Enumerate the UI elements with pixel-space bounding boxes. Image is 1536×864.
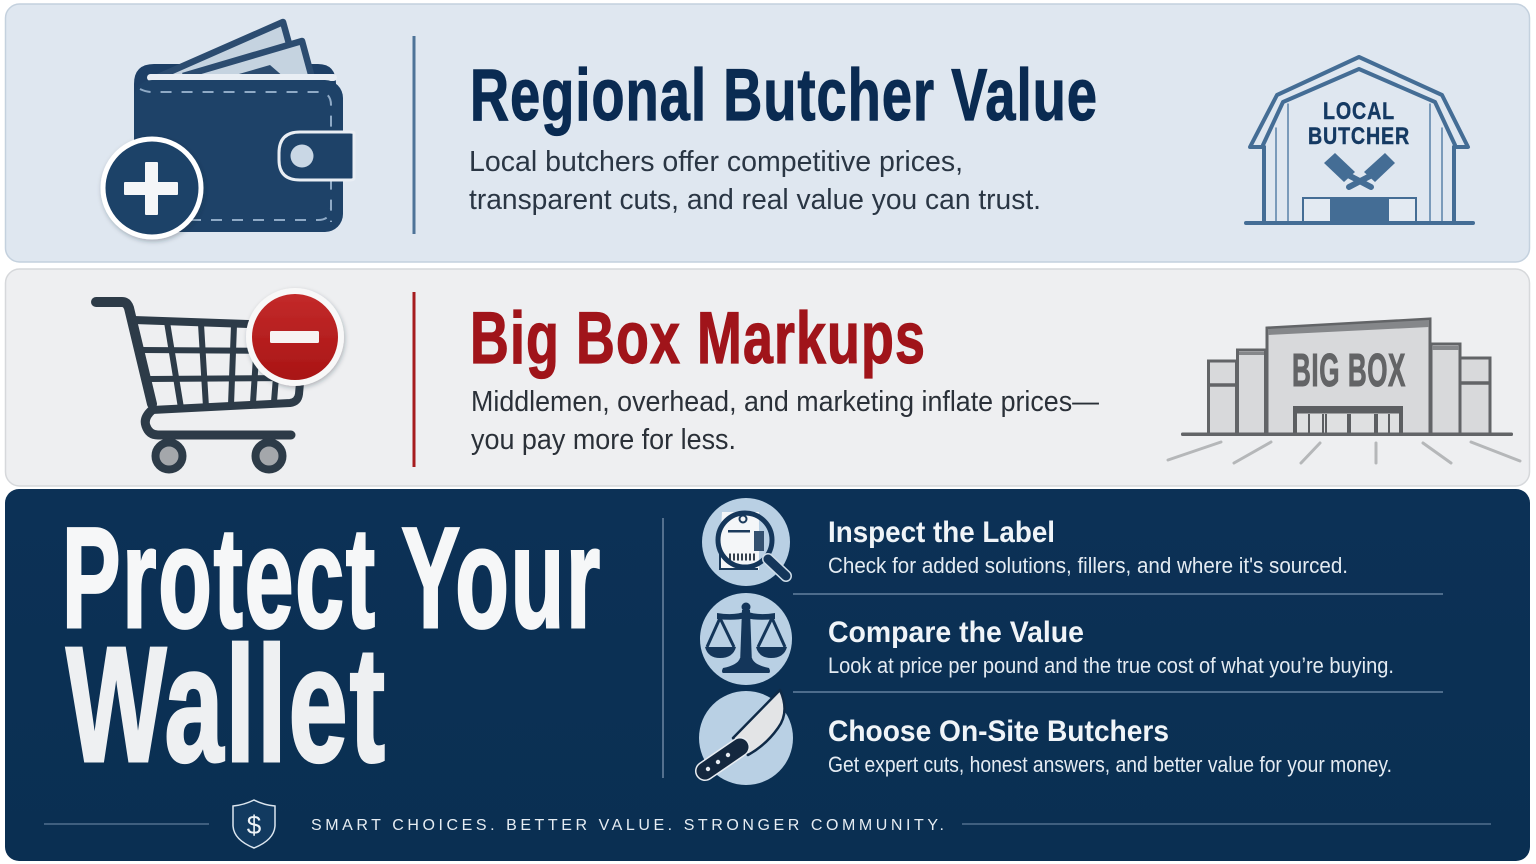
- divider: panel one: [412, 36, 416, 234]
- label: compare the value: Compare the Value: [828, 616, 1084, 649]
- separator two: [793, 691, 1443, 693]
- heading: big box markups: Big Box Markups: [470, 298, 926, 379]
- item: inspect the label: [702, 498, 1348, 586]
- icon: shield with dollar: [233, 800, 275, 848]
- icon: shield with dollar: $: [247, 810, 262, 840]
- label: inspect the label: Inspect the Label: [828, 516, 1055, 549]
- panel: protect your wallet: [5, 489, 1530, 861]
- text block: big box description: you pay more for less.: [471, 424, 736, 456]
- panel: big box markups: [6, 269, 1530, 486]
- heading: protect your wallet: Protect Your: [62, 499, 602, 658]
- icon: local butcher barn: LOCAL: [1323, 98, 1395, 125]
- icon: shopping cart with minus: [96, 291, 341, 470]
- icon: magnifying glass over label: [702, 498, 790, 586]
- icon: balance scales: [700, 593, 792, 685]
- item: compare the value: [700, 593, 1394, 685]
- text: compare description: Look at price per pound and the true cost of what you’re buying.: [828, 653, 1394, 678]
- text block: butcher description: transparent cuts, and real value you can trust.: [469, 184, 1041, 216]
- item: choose on-site butchers: [699, 690, 1392, 785]
- text block: butcher description: Local butchers offer competitive prices,: [469, 146, 963, 178]
- icon: local butcher barn: BUTCHER: [1308, 123, 1410, 150]
- tagline: SMART CHOICES. BETTER VALUE. STRONGER COMMUNITY.: [311, 817, 944, 834]
- divider: vertical: [662, 518, 664, 778]
- separator one: [793, 593, 1443, 595]
- text block: big box description: Middlemen, overhead, and marketing inflate prices—: [471, 386, 1099, 418]
- icon: chef knife: [699, 690, 793, 785]
- heading: regional butcher value: Regional Butcher Value: [470, 55, 1098, 136]
- icon: big box store: [1168, 319, 1520, 463]
- icon: local butcher barn: [1244, 57, 1475, 225]
- divider: panel two: [412, 292, 416, 467]
- text: inspect description: Check for added solutions, fillers, and where it's sourced.: [828, 553, 1348, 578]
- label: choose on-site butchers: Choose On-Site Butchers: [828, 715, 1169, 748]
- heading: protect your wallet: Wallet: [66, 613, 387, 796]
- panel: regional butcher value: [6, 4, 1530, 262]
- text: choose description: Get expert cuts, honest answers, and better value for your money.: [828, 752, 1392, 777]
- footer: tagline strip: [44, 800, 1491, 848]
- heading: protect your wallet: [62, 499, 602, 796]
- icon: wallet with plus: [103, 22, 354, 237]
- icon: big box store: BIG BOX: [1292, 344, 1406, 396]
